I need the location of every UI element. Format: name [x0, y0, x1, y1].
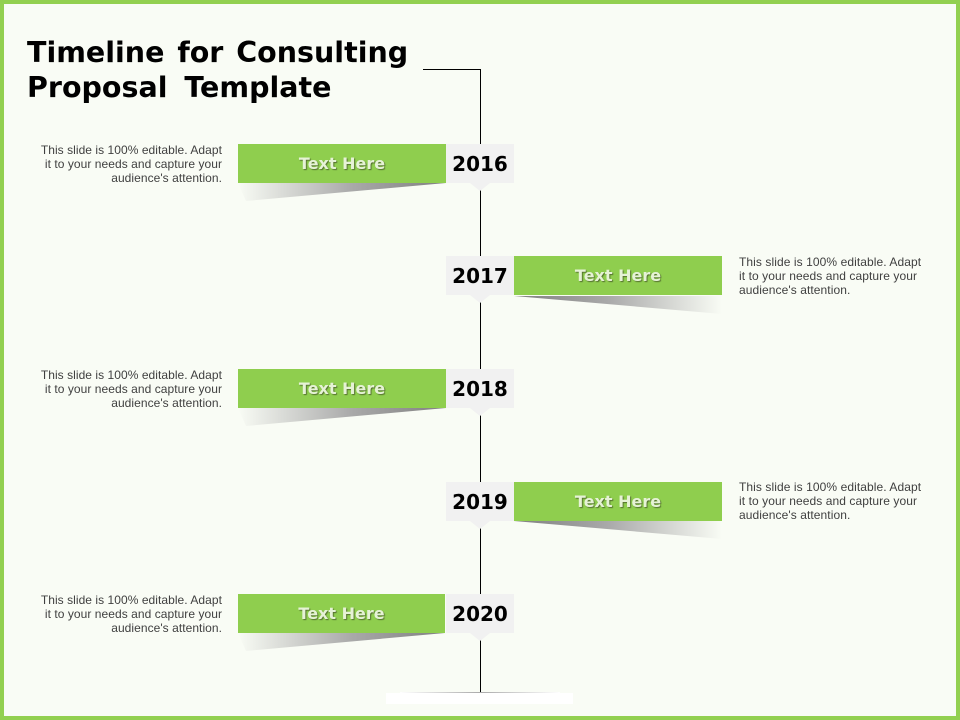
text: This slide is 100% editable. Adapt: [739, 480, 921, 494]
text: it to your needs and capture your: [739, 269, 917, 283]
item 2020: [41, 593, 514, 641]
text: 2019: [452, 490, 508, 514]
text: it to your needs and capture your: [45, 382, 222, 396]
text: audience's attention.: [111, 621, 222, 635]
text: it to your needs and capture your: [739, 494, 917, 508]
text: it to your needs and capture your: [45, 607, 222, 621]
text: 2016: [452, 152, 508, 176]
item 2016: [41, 143, 514, 191]
item 2019: [446, 480, 921, 529]
text: Text Here: [575, 266, 661, 285]
text: 2018: [452, 377, 508, 401]
text: audience's attention.: [111, 171, 222, 185]
text: This slide is 100% editable. Adapt: [41, 368, 222, 382]
text: audience's attention.: [739, 283, 850, 297]
text: it to your needs and capture your: [45, 157, 222, 171]
text: Text Here: [298, 604, 385, 623]
text: Text Here: [299, 379, 385, 398]
text: 2020: [452, 602, 508, 626]
text: This slide is 100% editable. Adapt: [41, 143, 222, 157]
title: Timeline for Consulting: [27, 36, 408, 69]
text: audience's attention.: [111, 396, 222, 410]
item 2017: [446, 255, 921, 303]
text: Text Here: [575, 492, 661, 511]
title: Proposal Template: [27, 71, 331, 104]
title: [27, 36, 408, 104]
item 2018: [41, 368, 514, 416]
text: audience's attention.: [739, 508, 850, 522]
text: This slide is 100% editable. Adapt: [41, 593, 222, 607]
text: 2017: [452, 264, 508, 288]
text: This slide is 100% editable. Adapt: [739, 255, 921, 269]
text: Text Here: [299, 154, 385, 173]
